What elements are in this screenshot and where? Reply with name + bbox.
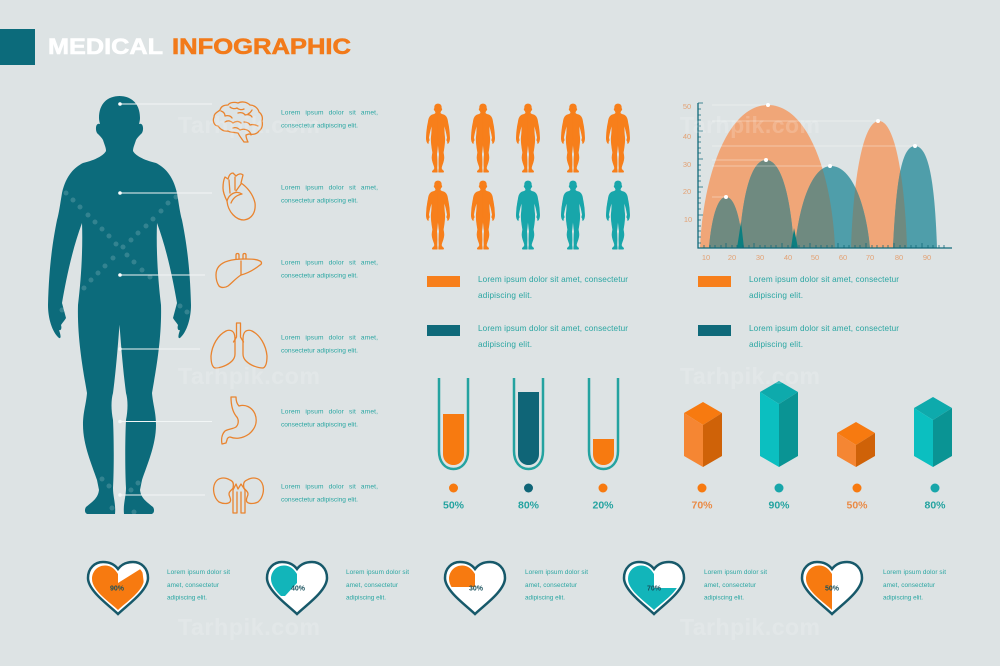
watermarks: Tarhpik.com xyxy=(680,614,820,640)
icon: brain xyxy=(213,102,262,142)
peak markers xyxy=(724,103,917,199)
title xyxy=(48,34,351,59)
watermarks: Tarhpik.com xyxy=(178,363,320,389)
text: heart 30%: amet, consectetur xyxy=(525,582,578,589)
y axis labels xyxy=(683,102,692,224)
test tube 50% xyxy=(439,378,468,512)
heart stat 40%: 40% xyxy=(291,586,306,592)
dark intersections xyxy=(737,222,798,248)
y axis labels: 40 xyxy=(683,132,691,141)
text: heart 30% xyxy=(525,569,588,602)
text: lungs: consectetur adipiscing elit. xyxy=(281,348,358,354)
icon: heart organ xyxy=(223,173,255,220)
test tube 20%: 20% xyxy=(592,500,614,512)
x axis labels: 90 xyxy=(923,253,931,262)
y axis labels: 10 xyxy=(684,215,692,224)
text: heart 70%: adipiscing elit. xyxy=(704,594,744,602)
text: heart 30%: Lorem ipsum dolor sit xyxy=(525,569,588,576)
icon: stomach xyxy=(222,397,256,444)
text: stomach: Lorem ipsum dolor sit amet, xyxy=(281,408,378,416)
text: heart 70%: Lorem ipsum dolor sit xyxy=(704,569,767,576)
text: heart 70%: amet, consectetur xyxy=(704,582,757,589)
text: heart xyxy=(281,184,378,204)
heart stat 50% xyxy=(802,558,862,618)
watermarks: Tarhpik.com xyxy=(680,363,820,389)
x axis labels: 60 xyxy=(839,253,847,262)
title: MEDICAL xyxy=(48,34,163,59)
text: liver xyxy=(281,260,378,280)
test tube 80%: 80% xyxy=(518,500,539,512)
x axis labels: 30 xyxy=(756,253,764,262)
isometric bar 50% xyxy=(837,422,875,512)
heart stat 30%: 30% xyxy=(469,586,484,592)
legend: chart orange xyxy=(698,275,899,300)
test tube 80% xyxy=(514,378,543,512)
human body silhouette with callout lines xyxy=(48,96,212,514)
text: heart 40% xyxy=(346,569,409,602)
legend: people dark: Lorem ipsum dolor sit amet, consectetur xyxy=(478,324,628,333)
text: brain: Lorem ipsum dolor sit amet, xyxy=(281,110,378,116)
legend: chart dark: adipiscing elit. xyxy=(749,340,803,349)
test tube 20% xyxy=(589,378,618,512)
heart stat 70%: 70% xyxy=(647,586,662,592)
icon: liver xyxy=(216,254,262,288)
heart stat 50%: 50% xyxy=(825,586,840,592)
text: heart 50%: adipiscing elit. xyxy=(883,594,923,602)
heart stat 90%: 90% xyxy=(110,586,125,592)
legend: people dark: adipiscing elit. xyxy=(478,340,532,349)
text: stomach: consectetur adipiscing elit. xyxy=(281,422,358,428)
icon: kidneys xyxy=(214,478,263,513)
test tube 50%: 50% xyxy=(443,500,464,512)
y axis labels: 30 xyxy=(683,160,691,169)
heart stat 90% xyxy=(88,558,148,618)
text: heart 50%: amet, consectetur xyxy=(883,582,936,589)
text: liver: consectetur adipiscing elit. xyxy=(281,272,358,280)
x axis labels: 50 xyxy=(811,253,819,262)
watermarks: Tarhpik.com xyxy=(680,112,820,138)
heart stat 30% xyxy=(445,558,505,614)
header square xyxy=(0,29,35,65)
text: heart: Lorem ipsum dolor sit amet, xyxy=(281,184,378,192)
legend: people dark xyxy=(427,324,628,349)
legend: chart orange: adipiscing elit. xyxy=(749,291,803,300)
legend: people orange xyxy=(427,275,628,300)
x axis labels: 70 xyxy=(866,253,874,262)
icon: lungs xyxy=(211,323,267,368)
heart stat 70% xyxy=(624,558,684,618)
text: liver: Lorem ipsum dolor sit amet, xyxy=(281,260,378,266)
heart stat 40% xyxy=(267,558,327,614)
text: heart 90%: Lorem ipsum dolor sit xyxy=(167,569,230,576)
watermarks: Tarhpik.com xyxy=(178,112,320,138)
row 2 orange figures xyxy=(426,181,495,249)
x axis labels xyxy=(702,253,931,262)
isometric bar 50%: 50% xyxy=(846,500,868,512)
row 2 teal figures xyxy=(516,181,630,249)
y axis labels: 20 xyxy=(683,187,691,196)
text: lungs xyxy=(281,334,378,354)
text: heart: consectetur adipiscing elit. xyxy=(281,198,358,204)
text: heart 50%: Lorem ipsum dolor sit xyxy=(883,569,946,576)
isometric bar 70% xyxy=(684,402,722,512)
legend: people orange: adipiscing elit. xyxy=(478,291,532,300)
x axis labels: 20 xyxy=(728,253,736,262)
isometric bar 80%: 80% xyxy=(924,500,946,512)
text: brain: consectetur adipiscing elit. xyxy=(281,122,358,130)
text: heart 90%: adipiscing elit. xyxy=(167,594,207,602)
text: lungs: Lorem ipsum dolor sit amet, xyxy=(281,334,378,342)
axes xyxy=(698,103,952,248)
orange figures row 1 xyxy=(426,104,630,172)
isometric bar 90% xyxy=(760,381,798,512)
teal domes xyxy=(709,146,937,248)
callout lines xyxy=(118,102,212,497)
isometric bar 80% xyxy=(914,397,952,512)
orange domes xyxy=(700,105,907,248)
y axis labels: 50 xyxy=(683,102,691,111)
text: heart 40%: Lorem ipsum dolor sit xyxy=(346,569,409,576)
x axis labels: 10 xyxy=(702,253,710,262)
legend: chart dark: Lorem ipsum dolor sit amet, consectetur xyxy=(749,324,899,333)
text: stomach xyxy=(281,408,378,428)
legend: chart dark xyxy=(698,324,899,349)
text: kidneys: Lorem ipsum dolor sit amet, xyxy=(281,484,378,490)
dome area chart xyxy=(683,102,952,262)
text: heart 90%: amet, consectetur xyxy=(167,582,220,589)
text: kidneys: consectetur adipiscing elit. xyxy=(281,496,358,504)
watermarks: Tarhpik.com xyxy=(178,614,320,640)
isometric bar 70%: 70% xyxy=(692,500,713,512)
isometric bar 90%: 90% xyxy=(768,500,790,512)
title: INFOGRAPHIC xyxy=(172,34,351,59)
legend: chart orange: Lorem ipsum dolor sit amet, consectetur xyxy=(749,275,899,284)
text: kidneys xyxy=(281,484,378,504)
text: brain xyxy=(281,110,378,130)
legend: people orange: Lorem ipsum dolor sit amet, consectetur xyxy=(478,275,628,284)
axis ticks xyxy=(698,103,944,248)
pictogram: ten people xyxy=(426,104,630,249)
watermark dots xyxy=(60,190,190,514)
dome overlaps xyxy=(709,160,907,248)
text: heart 50% xyxy=(883,569,946,602)
x axis labels: 80 xyxy=(895,253,903,262)
text: heart 40%: amet, consectetur xyxy=(346,582,399,589)
x axis labels: 40 xyxy=(784,253,792,262)
text: heart 30%: adipiscing elit. xyxy=(525,594,565,602)
text: heart 40%: adipiscing elit. xyxy=(346,594,386,602)
watermarks xyxy=(178,112,820,640)
text: heart 90% xyxy=(167,569,230,602)
value guide lines xyxy=(712,105,913,197)
text: heart 70% xyxy=(704,569,767,602)
